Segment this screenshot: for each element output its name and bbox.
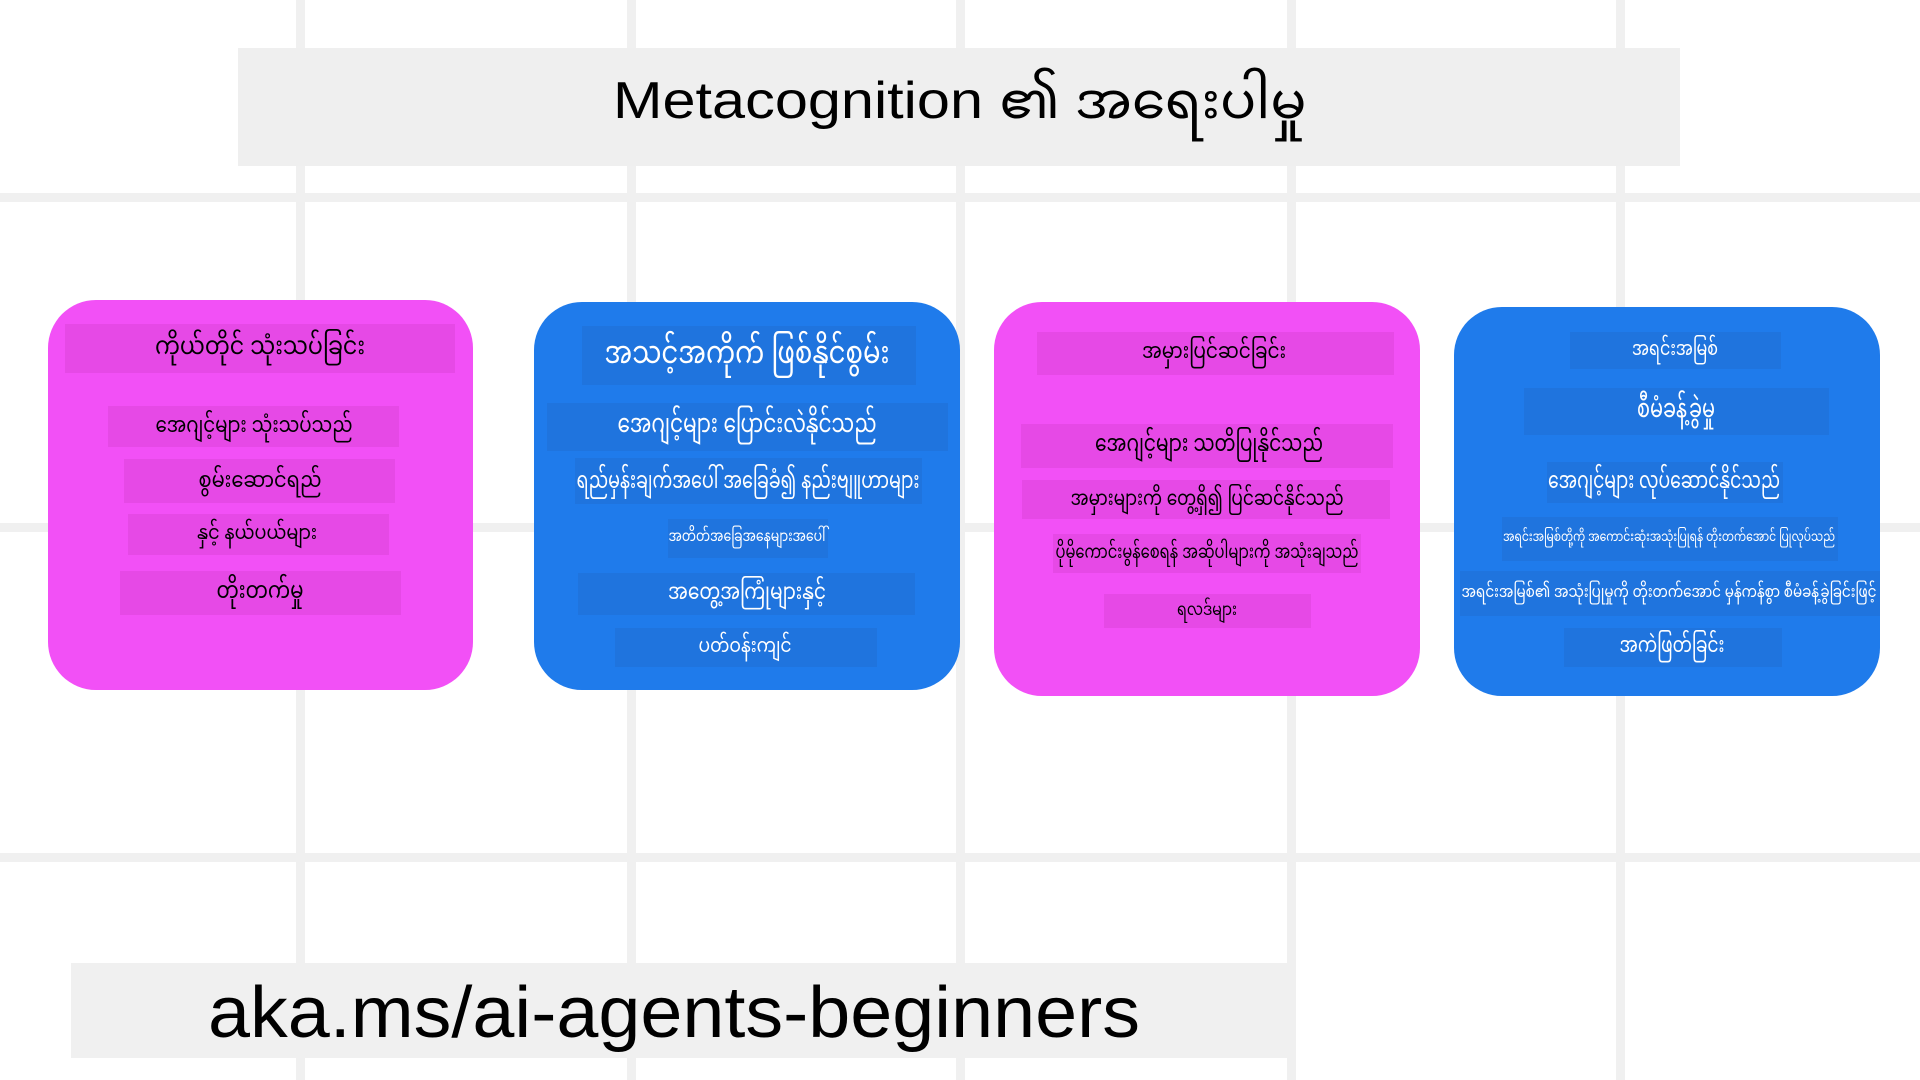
footer link: aka.ms/ai-agents-beginners xyxy=(208,973,1140,1053)
heading: error correction: အမှားပြင်ဆင်ခြင်း xyxy=(1142,335,1286,368)
heading: resource: အရင်းအမြစ် xyxy=(1632,334,1718,364)
panel: error correction xyxy=(994,302,1420,696)
heading: resource xyxy=(1570,332,1781,369)
text: performance xyxy=(124,459,395,503)
text: apply for better xyxy=(1053,534,1361,573)
panel: self-reflection xyxy=(48,300,473,690)
text: agents reflect xyxy=(108,406,399,447)
text: evaluation xyxy=(1564,628,1782,667)
text: agents can change xyxy=(547,403,948,451)
text: agents notice: အေဂျင့်များ သတိပြုနိုင်သည် xyxy=(1095,427,1323,462)
heading: self-reflection: ကိုယ်တိုင် သုံးသပ်ခြင်း xyxy=(155,328,365,366)
text: results xyxy=(1104,594,1311,628)
text: experiences xyxy=(578,573,915,615)
text: improvement xyxy=(120,571,401,615)
footer link xyxy=(71,963,1294,1058)
heading: management xyxy=(1524,388,1829,435)
text: goal based strategies xyxy=(575,458,922,504)
heading: management: စီမံခန့်ခွဲမှု xyxy=(1637,391,1715,429)
heading: adaptability: အသင့်အကိုက် ဖြစ်နိုင်စွမ်း xyxy=(604,329,890,378)
heading: adaptability xyxy=(582,326,916,385)
panel: adaptability xyxy=(534,302,960,690)
heading: self-reflection xyxy=(65,324,455,373)
text: apply for better: ပိုမိုကောင်းမွန်စေရန် အဆိုပါများကို အသုံးချသည် xyxy=(1056,537,1358,568)
text: performance: စွမ်းဆောင်ရည် xyxy=(198,464,322,497)
text: and areas: နှင့် နယ်ပယ်များ xyxy=(197,518,317,549)
text: results: ရလဒ်များ xyxy=(1177,598,1237,623)
text: evaluation: အကဲဖြတ်ခြင်း xyxy=(1620,629,1724,662)
panel: resource management xyxy=(1454,307,1880,696)
text: improvement: တိုးတက်မှု xyxy=(216,574,304,609)
text: agents can change: အေဂျင့်များ ပြောင်းလဲနိုင်သည် xyxy=(618,406,876,444)
text: manage resource use xyxy=(1460,571,1880,616)
text: agents notice xyxy=(1021,424,1393,468)
text: goal based strategies: ရည်မှန်းချက်အပေါ် အခြေခံ၍ နည်းဗျူဟာများ xyxy=(576,464,920,499)
text: agents can perform xyxy=(1547,462,1783,503)
title: ၏ အရေးပါမှု xyxy=(1000,68,1306,141)
text: environment: ပတ်ဝန်းကျင် xyxy=(698,631,792,661)
heading: error correction xyxy=(1037,332,1394,375)
text: optimize resources xyxy=(1502,517,1838,561)
text: detect and fix errors: အမှားများကို တွေ့ရှိ၍ ပြင်ဆင်နိုင်သည် xyxy=(1070,482,1344,516)
text: detect and fix errors xyxy=(1022,480,1390,519)
text: agents reflect: အေဂျင့်များ သုံးသပ်သည် xyxy=(156,409,352,443)
text: past conditions xyxy=(668,519,830,558)
text: environment xyxy=(615,628,877,667)
text: and areas xyxy=(128,514,389,555)
text: agents can perform: အေဂျင့်များ လုပ်ဆောင်နိုင်သည် xyxy=(1548,464,1780,499)
text: past conditions: အတိတ်အခြေအနေများအပေါ် xyxy=(668,526,830,548)
title xyxy=(238,48,1680,166)
title: Metacognition xyxy=(613,72,983,130)
text: experiences: အတွေ့အကြုံများနှင့် xyxy=(668,575,826,610)
